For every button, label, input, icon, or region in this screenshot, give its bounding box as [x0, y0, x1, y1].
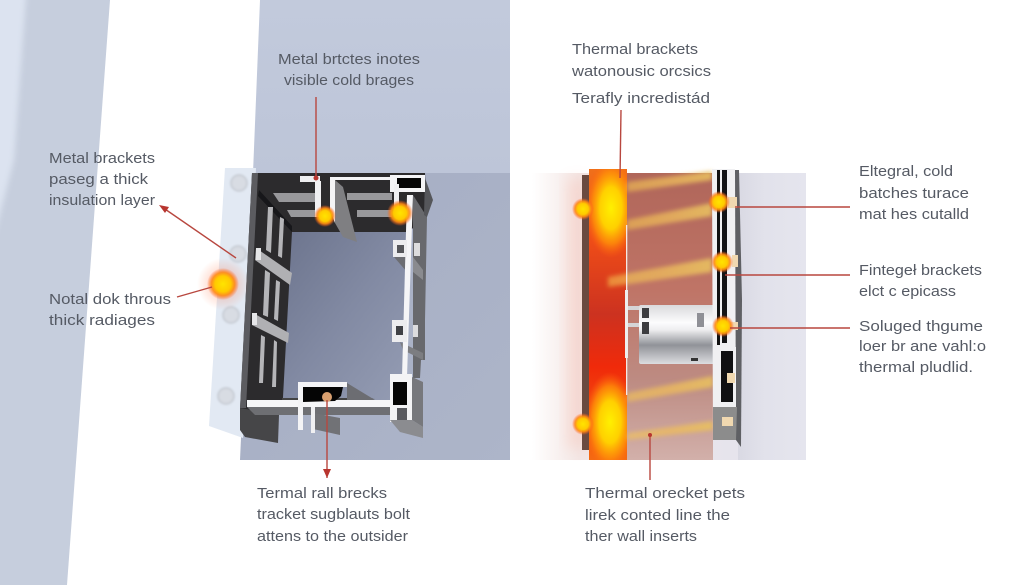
callout: insulation layer: Metal brackets: [49, 150, 155, 167]
callout: right middle: [859, 262, 982, 300]
leader arrowheads and dots: [159, 176, 652, 478]
right diagram background panel: [532, 173, 806, 460]
callout: right middle: elct c epicass: [859, 283, 956, 300]
top slats: [273, 193, 392, 217]
hot insulation bar: [589, 169, 627, 460]
left wall strip: [0, 0, 110, 585]
callout: bottom left diagram: [257, 485, 411, 545]
left vertical slats: [259, 207, 284, 387]
middle cavity: [627, 173, 713, 460]
white rails: [402, 195, 413, 377]
callout: bottom left diagram: Termal rall brecks: [257, 485, 387, 502]
white rim: [626, 225, 627, 395]
left diagram: insulated frame with cold bridges: [209, 168, 433, 443]
callout: bottom right diagram: lirek conted line the: [585, 507, 730, 524]
callout: radiating point: [49, 291, 171, 329]
callout: radiating point: thick radiages: [49, 312, 155, 329]
beige clips: [722, 197, 738, 426]
back wall panel: left diagram: [240, 0, 510, 460]
callout: insulation layer: [49, 150, 155, 209]
interior floor: [282, 230, 410, 400]
callout: right lower: Soluged thgume: [859, 318, 983, 335]
callout: top right diagram: watonousic orcsics: [571, 63, 711, 80]
leader lines: [162, 97, 850, 480]
callout: right lower: loer br ane vahl:o: [859, 338, 986, 355]
clips on right rail: [393, 240, 407, 257]
top right black profile: [390, 175, 425, 192]
right diagram: heated wall section: [566, 158, 742, 472]
right diagram glow points: [572, 191, 734, 435]
cylinder unit: [639, 305, 716, 364]
callout: right upper: [859, 163, 969, 223]
bottom rail: [282, 398, 375, 402]
callout: top right diagram: Thermal brackets: [572, 41, 698, 58]
centre fin: [335, 180, 357, 242]
callout: top left diagram: visible cold brages: [284, 72, 414, 89]
dark frame: [240, 173, 427, 410]
heat beams: [608, 171, 713, 440]
mounted bracket: [625, 290, 628, 358]
callout: top right diagram: [571, 41, 711, 107]
crossbars: [255, 248, 292, 285]
outer wall edge: [566, 178, 588, 448]
callout: right middle: Fintegeł brackets: [859, 262, 982, 279]
callout: bottom right diagram: ther wall inserts: [585, 528, 697, 545]
callout: insulation layer: paseg a thick: [49, 171, 149, 188]
right profile rail: [712, 169, 737, 440]
heat blooms: [589, 169, 627, 460]
callout: bottom left diagram: tracket sugblauts bolt: [257, 506, 411, 523]
glass insulation layer: [209, 168, 256, 438]
callout: insulation layer: insulation layer: [49, 192, 155, 209]
callout: top left diagram: [278, 51, 420, 89]
callout: top right diagram: Terafly incredistád: [572, 90, 710, 107]
callout: bottom right diagram: [585, 485, 745, 545]
bottom left profile: [298, 382, 347, 387]
callout: right upper: batches turace: [859, 185, 969, 202]
callout: right lower: thermal pludlid.: [859, 359, 973, 376]
callout: top left diagram: Metal brtctes inotes: [278, 51, 420, 68]
fixing bolts: [218, 175, 247, 404]
callout: radiating point: Notal dok throus: [49, 291, 171, 308]
callout: bottom right diagram: Thermal orecket pets: [585, 485, 745, 502]
left diagram glow points: [197, 200, 413, 402]
callout: right upper: Eltegral, cold: [859, 163, 953, 180]
callout: right upper: mat hes cutalld: [859, 206, 969, 223]
bottom right profile: [390, 374, 412, 422]
callout: right lower: [859, 318, 986, 376]
callout: bottom left diagram: attens to the outsider: [257, 528, 408, 545]
right side gray face: [413, 195, 427, 378]
